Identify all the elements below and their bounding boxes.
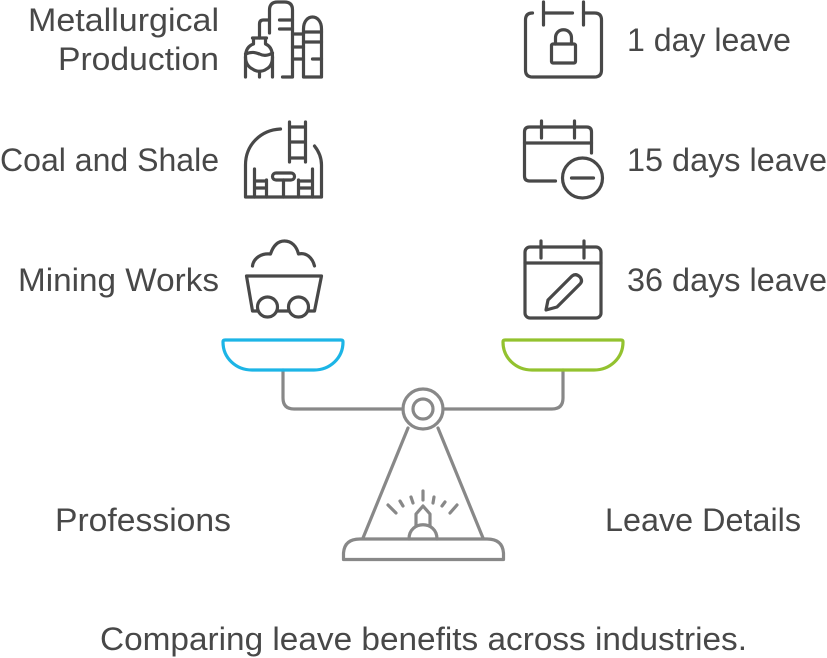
label: 1 day leave: 1 day leave	[627, 22, 791, 58]
icon: mine dome with ladder and table	[246, 122, 322, 197]
label: Coal and Shale: Coal and Shale	[0, 142, 219, 178]
caption: Comparing leave benefits across industries.	[100, 621, 747, 657]
right pan	[503, 340, 623, 370]
label: 36 days leave: 36 days leave	[627, 262, 827, 298]
icon: calendar with lock	[526, 2, 602, 77]
label: Mining Works: Mining Works	[18, 262, 219, 298]
balance scale	[223, 340, 623, 560]
label: 15 days leave: 15 days leave	[627, 142, 827, 178]
label: Metallurgical Production	[28, 2, 219, 77]
icon: calendar with minus	[524, 121, 602, 198]
stand	[363, 428, 483, 538]
lamp with rays	[388, 491, 457, 539]
left pan	[223, 340, 343, 370]
label: Professions: Professions	[55, 502, 231, 538]
scale arm	[283, 370, 563, 409]
pivot	[403, 389, 443, 429]
icon: calendar with pencil	[525, 241, 601, 318]
icon: refinery with flask	[246, 2, 322, 77]
label: Metallurgical Production: Metallurgical	[28, 2, 219, 38]
icon: mine cart with ore	[246, 241, 322, 317]
label: Leave Details: Leave Details	[605, 502, 801, 538]
label: Metallurgical Production: Production	[58, 41, 219, 77]
base	[344, 539, 504, 560]
